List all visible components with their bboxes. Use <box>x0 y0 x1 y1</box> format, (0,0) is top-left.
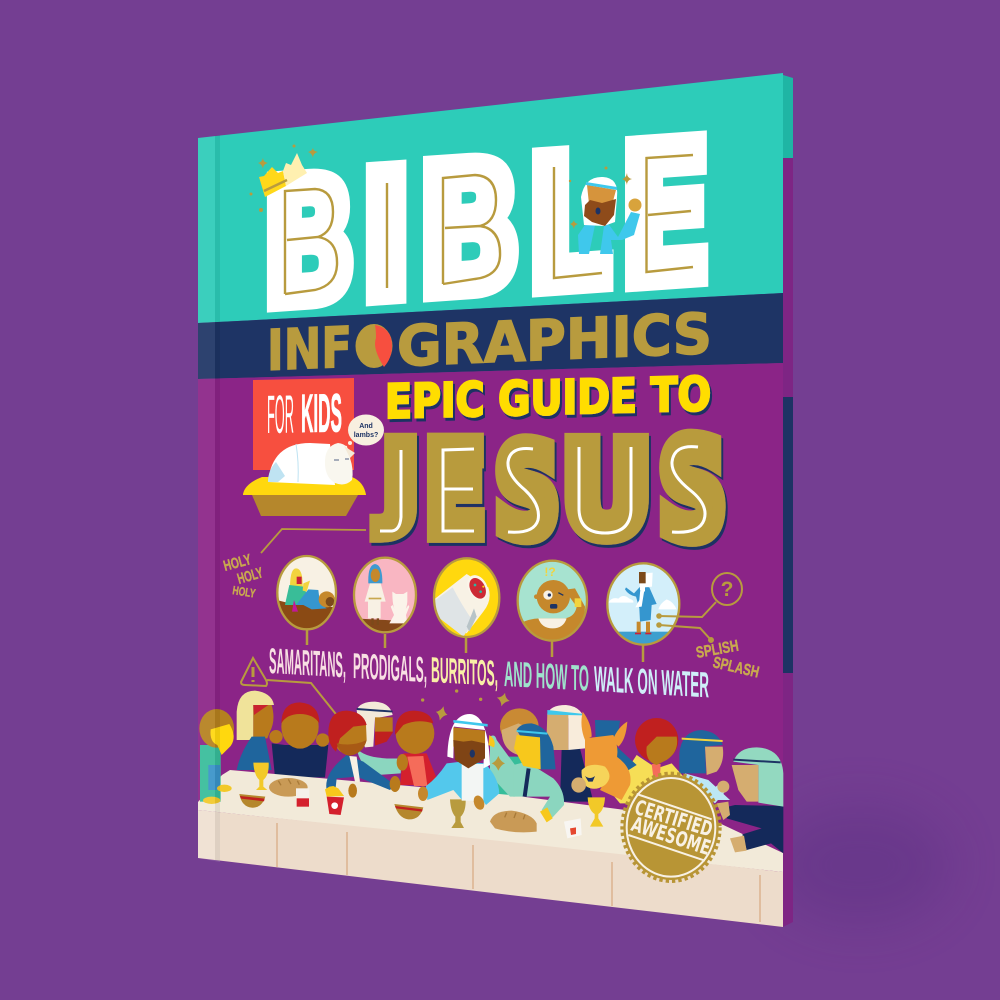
figure: bearded redhead in blue suit <box>326 711 400 798</box>
figure: left child <box>199 709 234 804</box>
title: BIBLE: L <box>526 114 611 333</box>
heading: JESUS: E <box>425 417 485 564</box>
figure: redhead in red <box>395 711 439 786</box>
title: BIBLE: B <box>416 121 522 337</box>
book spine shading <box>198 135 220 861</box>
drink cup <box>296 788 309 807</box>
seal: certified awesome <box>622 774 720 881</box>
red FOR KIDS panel <box>253 378 354 470</box>
title: BIBLE: I <box>359 133 413 341</box>
subtitle line: SAMARITANS, <box>269 640 346 685</box>
bread <box>269 778 308 797</box>
medallion: baby: !? <box>544 565 556 579</box>
table items, right half <box>490 774 720 881</box>
HOLY HOLY HOLY labels: HOLY <box>222 551 253 575</box>
table items, left half <box>239 763 466 828</box>
lamb in manger <box>243 443 366 516</box>
figure: redhead in navy <box>269 702 329 777</box>
question bubble and leader: ? <box>721 578 733 601</box>
title: BIBLE <box>261 102 712 346</box>
SPLISH SPLASH labels: SPLASH <box>711 654 761 681</box>
figure: keffiyeh disciple behind <box>357 702 408 775</box>
figure: blonde disciple <box>237 691 274 770</box>
heading: JESUS <box>376 413 726 567</box>
chalice <box>253 763 269 790</box>
book: WALK ON WATER <box>594 658 709 705</box>
manger <box>252 495 358 516</box>
speech bubble: And lambs?: And <box>359 423 373 430</box>
heading: JESUS: J <box>376 420 419 539</box>
title: BIBLE: B <box>261 139 357 346</box>
bowl <box>394 804 423 819</box>
bread <box>490 811 537 832</box>
subtitle line <box>269 640 709 705</box>
figure: blue hood woman <box>679 730 730 803</box>
figure: man waving in the letter L <box>569 166 642 254</box>
figure: disciple with tan face <box>493 708 539 797</box>
seal: certified awesome: AWESOME <box>628 812 714 860</box>
takeout box <box>564 818 582 838</box>
medallion: walking on water <box>605 562 683 648</box>
FOR KIDS label: FOR <box>267 385 294 445</box>
lamb head <box>325 443 353 484</box>
gold inlines in BIBLE letters <box>285 155 693 294</box>
last supper scene, figures in front of the table on the left <box>199 709 400 804</box>
heading: JESUS: S <box>659 413 726 567</box>
table <box>198 770 783 927</box>
title: BIBLE: E <box>619 102 712 330</box>
subtitle line: BURRITOS, <box>431 649 498 694</box>
HOLY HOLY HOLY labels <box>222 551 265 601</box>
white inlines in JESUS letters <box>380 447 705 533</box>
figure: Jesus at center table <box>418 714 505 811</box>
fries <box>325 786 344 815</box>
speech bubble: And lambs? <box>345 414 384 448</box>
question bubble and leader <box>657 573 742 642</box>
medallion: Prodigal Son <box>353 557 417 633</box>
figure: blue hood man in mint <box>490 723 564 822</box>
sparkles <box>421 689 511 722</box>
figure: mint hood man <box>717 747 783 853</box>
heading: JESUS: U <box>562 417 651 565</box>
book right edge <box>783 75 793 927</box>
medallion: baby <box>517 560 590 643</box>
FOR KIDS label <box>267 383 342 445</box>
hay over lamb <box>243 480 366 495</box>
stems of the medallions <box>307 630 643 662</box>
speech bubble: And lambs?: lambs? <box>354 432 378 439</box>
figure: redhead in yellow <box>612 718 685 803</box>
subtitle line: AND HOW TO <box>504 653 589 699</box>
subtitle: INFOGRAPHICS <box>267 302 712 384</box>
subtitle line: PRODIGALS, <box>353 645 427 690</box>
chalice <box>588 797 605 827</box>
lamb body <box>268 443 335 485</box>
cover background bands <box>198 73 783 927</box>
figure: donkey <box>571 712 637 800</box>
HOLY HOLY HOLY labels: HOLY <box>232 583 256 601</box>
heading: JESUS: S <box>495 418 559 564</box>
book: KIDS <box>301 383 342 444</box>
SPLISH SPLASH labels: SPLISH <box>695 638 740 662</box>
medallion: Good Samaritan <box>277 555 340 632</box>
last supper scene, figures behind the table on the left <box>237 689 511 786</box>
bowl <box>239 794 265 808</box>
SPLISH SPLASH labels <box>695 638 761 681</box>
last supper scene, figures in front of the table on the right <box>490 723 783 853</box>
icon: crown <box>250 144 318 212</box>
book shadow <box>770 805 950 925</box>
medallion: burrito <box>430 557 503 640</box>
leader line to JESUS <box>261 529 366 553</box>
pie chart letter O <box>356 324 392 368</box>
book <box>198 73 793 927</box>
HOLY HOLY HOLY labels: HOLY <box>235 564 265 588</box>
seal: certified awesome: CERTIFIED <box>632 795 715 842</box>
chalice <box>450 799 466 828</box>
warning icon and leader <box>241 658 343 723</box>
figure: keffiyeh man in navy <box>547 705 593 802</box>
heading: EPIC GUIDE TO: EPIC GUIDE TO <box>385 367 711 430</box>
subtitle: INFOGRAPHICS: INF <box>267 315 352 384</box>
subtitle: INFOGRAPHICS: GRAPHICS <box>397 302 712 380</box>
last supper scene, figures behind the table on the right <box>493 705 730 803</box>
